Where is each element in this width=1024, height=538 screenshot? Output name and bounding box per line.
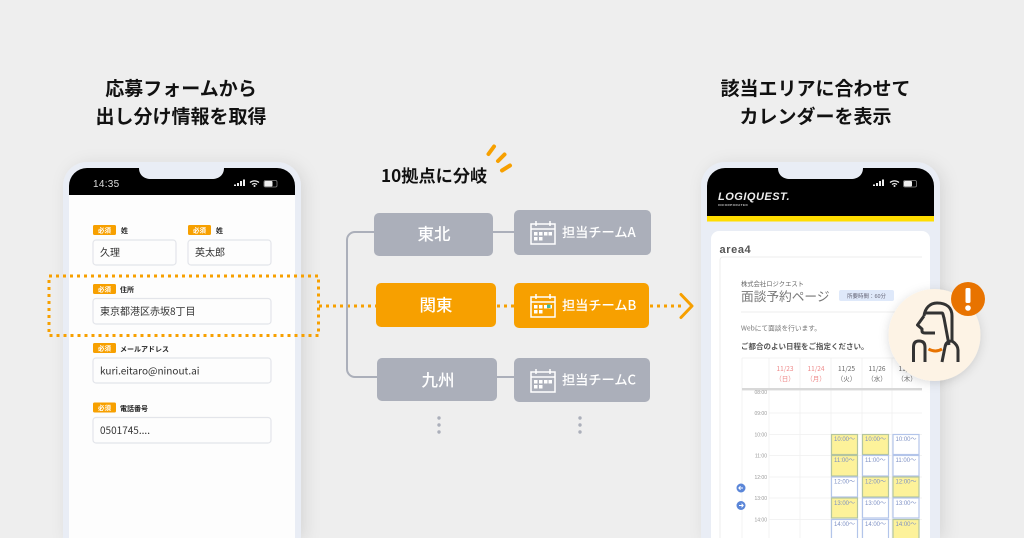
calendar grid: （水） [867,373,887,383]
title: right [720,74,911,129]
field: phone [93,402,271,443]
field: email [93,342,271,383]
person figure [914,303,958,362]
site header: INCORPORATED [718,203,748,207]
box: Kyushu: 九州 [422,367,454,391]
field: address: 必須 [98,284,112,294]
box: Tohoku: 東北 [418,221,451,245]
title: left: 応募フォームから [105,74,257,101]
box: Tohoku [374,213,493,256]
white content card [711,231,930,538]
field: last name: 必須 [98,224,112,234]
calendar grid [742,358,922,538]
title: right: カレンダーを表示 [739,102,892,129]
calendar grid: 10:00 [754,432,767,438]
box: Kanto [376,283,496,327]
time slots: 10:00〜 [834,437,855,443]
icon: nav arrows [736,484,746,510]
phone status bar [69,168,295,195]
icon: person alert [888,282,985,381]
field: first name [188,224,271,265]
inner frame [720,257,922,538]
calendar grid: 11/25 [838,363,855,373]
time slots [832,434,919,538]
title: left [95,74,267,129]
field: phone: 必須 [98,402,112,412]
time slots: 12:00〜 [865,480,886,486]
calendar grid: 09:00 [754,411,767,417]
connector: dotted line from address [319,304,376,308]
booking page header [741,279,922,352]
time slots: 14:00〜 [865,522,886,528]
field: phone: 0501745.... [100,422,150,437]
calendar grid: （火） [837,373,856,383]
time slots: 11:00〜 [834,458,855,464]
field: phone: 電話番号 [120,404,148,414]
field: first name: 必須 [193,224,206,234]
time slots: 14:00〜 [896,522,917,528]
field: address: 東京都港区赤坂8丁目 [100,303,196,318]
field: first name: 英太郎 [195,244,225,259]
calendar grid: （木） [897,373,917,383]
box: team C [514,358,650,402]
title: left: 出し分け情報を取得 [95,102,267,129]
time slots: 11:00〜 [896,458,916,464]
field: address: 住所 [120,285,134,295]
box: team B: 担当チームB [562,295,637,314]
calendar grid: 11/26 [869,363,886,373]
box: Kanto: 関東 [420,292,452,316]
booking page header: 株式会社ロジクエスト [741,279,804,288]
box: team A [514,210,651,255]
phone status bar: 14:35 [93,179,120,190]
card label: area4 [720,244,752,256]
time slots: 12:00〜 [834,480,855,486]
arrow: to calendar [650,294,692,318]
time slots: 13:00〜 [896,501,917,507]
calendar grid: （日） [775,373,795,383]
icon: more dots [437,416,582,434]
box: team A: 担当チームA [562,222,637,241]
site header [707,168,934,222]
field: last name [93,224,176,265]
booking page header: ご都合のよい日程をご指定ください。 [741,341,868,352]
site header: LOGIQUEST. [718,191,790,203]
calendar grid: 08:00 [754,390,767,396]
calendar grid: 12:00 [754,475,767,481]
alert badge [951,282,985,316]
calendar grid: 11:00 [755,454,767,460]
calendar grid: 13:00 [754,496,767,502]
booking page header: Webにて面談を行います。 [741,322,821,332]
time slots: 11:00〜 [865,458,886,464]
connector: branch tree [347,232,514,377]
panel: right phone calendar [701,162,940,538]
booking page header: 所要時間：60分 [847,292,887,300]
time slots: 10:00〜 [865,437,886,443]
time slots: 12:00〜 [896,480,917,486]
box: team C: 担当チームC [562,370,637,388]
icon: accent sparks [488,146,510,170]
box: team B [514,283,649,328]
calendar grid: 11/23 [777,363,794,373]
box: Kyushu [377,358,497,401]
field: email: 必須 [98,342,112,352]
time slots: 10:00〜 [896,437,917,443]
panel: left phone form [63,162,301,538]
field: first name: 姓 [216,226,223,236]
calendar grid: （月） [806,373,826,383]
time slots: 13:00〜 [865,501,886,507]
time slots: 13:00〜 [834,501,855,507]
calendar grid: 11/24 [808,363,825,373]
field: last name: 姓 [121,226,128,236]
title: right: 該当エリアに合わせて [720,74,911,101]
calendar grid: 11/27 [899,363,916,373]
calendar grid: 14:00 [754,518,767,524]
field: last name: 久理 [100,244,120,259]
heading: 10 branches: 10拠点に分岐 [381,162,487,187]
connector: Kanto to team B [497,304,514,308]
field: address [93,284,271,324]
highlight: dotted address box [49,276,318,336]
field: email: kuri.eitaro@ninout.ai [100,362,200,378]
time slots: 14:00〜 [834,522,855,528]
field: email: メールアドレス [120,344,169,354]
booking page header: 面談予約ページ [741,286,830,305]
